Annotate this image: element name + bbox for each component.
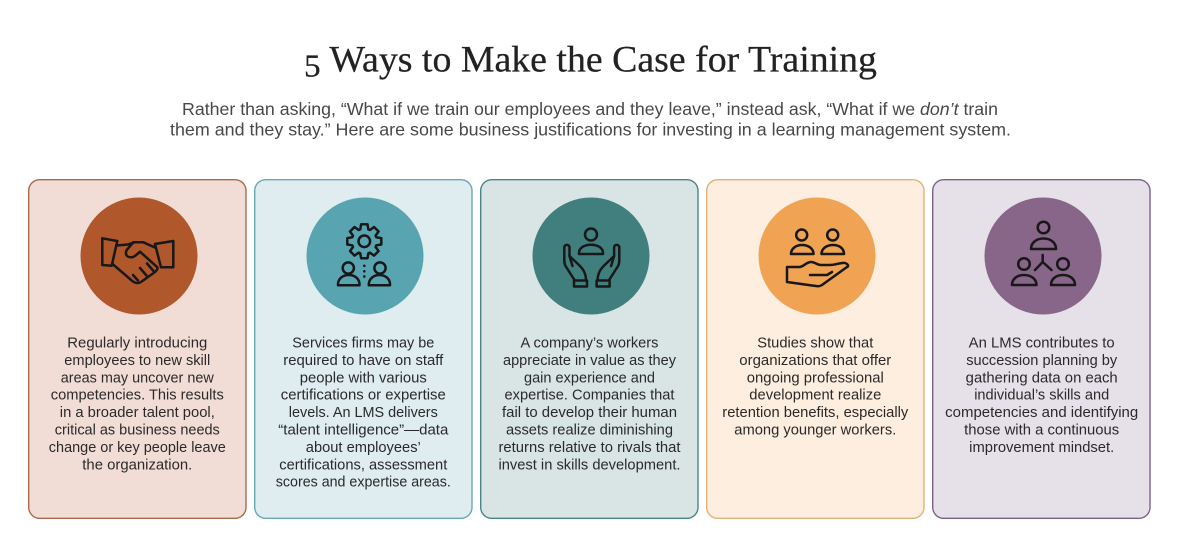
text block: development realize [749,388,881,404]
text block: competencies. This results [51,388,224,404]
text block: assets realize diminishing [506,422,673,438]
text block: about employees’ [306,440,421,456]
subtitle: them and they stay.” Here are some business justifications for investing in a learning management system. [170,120,1011,140]
icon: people hierarchy [984,198,1102,314]
text block: expertise. Companies that [504,388,674,404]
text block: certifications, assessment [279,457,447,473]
panel: retention [707,180,924,518]
text block: individual’s skills and [974,388,1109,404]
text block: people with various [300,370,427,386]
text block: levels. An LMS delivers [289,405,438,421]
text block: gain experience and [524,370,655,386]
text block: competencies and identifying [945,405,1138,421]
text block: Services firms may be [292,336,434,352]
text block: returns relative to rivals that [498,440,680,456]
icon: hands holding person [532,198,650,314]
text block: fail to develop their human [502,405,677,421]
text block: the organization. [82,457,192,473]
text block: those with a continuous [964,422,1119,438]
text block: areas may uncover new [61,370,214,386]
text block: employees to new skill [64,353,210,369]
text block: Studies show that [757,336,873,352]
panel: succession planning [933,180,1150,518]
text block: scores and expertise areas. [276,475,451,491]
text block: improvement mindset. [969,440,1114,456]
subtitle: Rather than asking, “What if we train our employees and they leave,” instead ask, “What if we don’t train [182,99,998,119]
text block: A company’s workers [520,336,658,352]
text block: critical as business needs [55,422,220,438]
panel: talent intelligence [255,180,472,518]
text block: required to have on staff [283,353,444,369]
text block [276,336,451,491]
text block: change or key people leave [49,440,226,456]
text block: in a broader talent pool, [60,405,215,421]
text block: gathering data on each [966,370,1118,386]
text block [498,336,680,473]
text block: certifications or expertise [281,388,446,404]
text block: An LMS contributes to [969,336,1115,352]
icon: handshake [80,198,198,314]
text block [722,336,909,438]
icon: gear and people [306,198,424,314]
panel: human assets [481,180,698,518]
text block: “talent intelligence”—data [278,422,449,438]
title: Ways to Make the Case for Training [321,38,877,80]
text block: organizations that offer [739,353,891,369]
text block: appreciate in value as they [503,353,677,369]
text block: retention benefits, especially [722,405,909,421]
text block: Regularly introducing [67,336,207,352]
subtitle [170,99,1011,140]
icon: hand with people [758,198,876,314]
panel: talent pool [29,180,246,518]
title: 5 [304,48,321,84]
text block: ongoing professional [747,370,884,386]
text block: among younger workers. [734,422,896,438]
text block: invest in skills development. [498,457,680,473]
text block [945,336,1138,456]
text block: succession planning by [966,353,1118,369]
text block [49,336,226,473]
